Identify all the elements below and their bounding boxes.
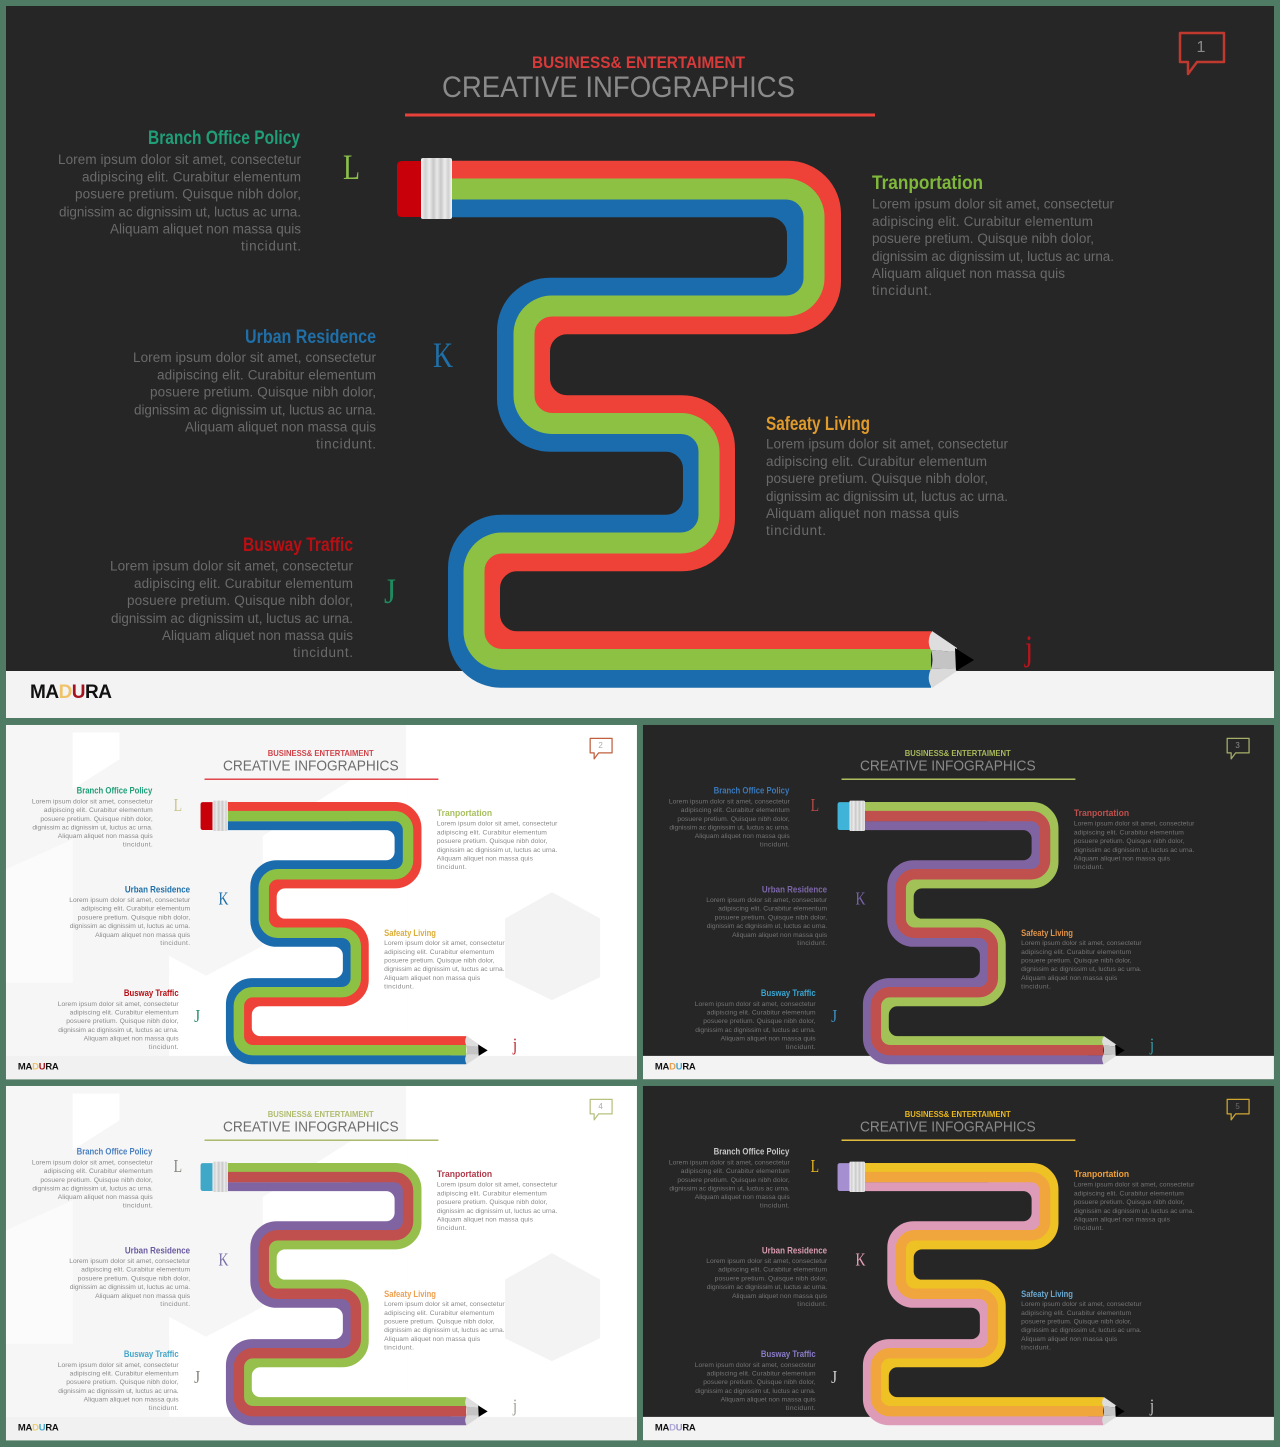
text block: Busway Traffic: Busway Traffic <box>124 988 179 999</box>
text block: Urban Residence: Aliquam aliquet non massa quis <box>732 1293 828 1300</box>
text block: Tranportation: adipiscing elit. Curabitur elementum <box>437 1190 547 1197</box>
text block: Urban Residence: Aliquam aliquet non massa quis <box>95 1293 191 1300</box>
letter L: L <box>174 795 182 815</box>
text block: Urban Residence: tincidunt. <box>160 940 190 947</box>
text block: Safeaty Living: Aliquam aliquet non massa quis <box>384 975 481 982</box>
text block: Busway Traffic: posuere pretium. Quisque nibh dolor, <box>66 1379 179 1386</box>
text block: Busway Traffic: posuere pretium. Quisque nibh dolor, <box>127 593 353 608</box>
title: CREATIVE INFOGRAPHICS <box>223 1118 399 1135</box>
text block: Branch Office Policy: dignissim ac dignissim ut, luctus ac urna. <box>32 825 153 832</box>
pencil <box>201 801 488 1064</box>
text block: Branch Office Policy: Branch Office Policy <box>714 786 790 797</box>
text block: Busway Traffic: dignissim ac dignissim ut, luctus ac urna. <box>695 1388 816 1395</box>
slide background <box>643 725 1274 1079</box>
text block: Busway Traffic: adipiscing elit. Curabitur elementum <box>70 1009 179 1016</box>
icon: speech bubble with number <box>590 738 612 759</box>
text block: Tranportation: adipiscing elit. Curabitur elementum <box>437 829 547 836</box>
text block: Urban Residence: posuere pretium. Quisque nibh dolor, <box>78 914 190 921</box>
text block: Busway Traffic: dignissim ac dignissim ut, luctus ac urna. <box>58 1027 179 1034</box>
text block: Safeaty Living: Lorem ipsum dolor sit amet, consectetur <box>1021 1301 1142 1308</box>
text block: Urban Residence: Aliquam aliquet non massa quis <box>95 932 191 939</box>
text block: Branch Office Policy: Lorem ipsum dolor sit amet, consectetur <box>58 152 302 167</box>
text block: Urban Residence: dignissim ac dignissim ut, luctus ac urna. <box>70 1284 190 1291</box>
text block: Busway Traffic: adipiscing elit. Curabitur elementum <box>134 576 353 591</box>
slide background <box>6 1086 637 1440</box>
text block: Urban Residence: Urban Residence <box>125 885 190 896</box>
text block: Tranportation: Aliquam aliquet non massa quis <box>1074 855 1171 862</box>
text block: Safeaty Living: Lorem ipsum dolor sit amet, consectetur <box>384 940 505 947</box>
text block: Urban Residence: dignissim ac dignissim ut, luctus ac urna. <box>707 923 827 930</box>
title: CREATIVE INFOGRAPHICS <box>860 757 1036 774</box>
letter j: j <box>1023 628 1033 668</box>
logo: MADURA <box>655 1061 696 1072</box>
text block: Branch Office Policy: Aliquam aliquet non massa quis <box>58 1194 153 1201</box>
text block: Safeaty Living: posuere pretium. Quisque nibh dolor, <box>384 1318 495 1325</box>
text block: Urban Residence: dignissim ac dignissim ut, luctus ac urna. <box>70 923 190 930</box>
icon: speech bubble with number <box>1227 1099 1249 1120</box>
text block: Tranportation: adipiscing elit. Curabitur elementum <box>1074 829 1184 836</box>
text block: Tranportation: adipiscing elit. Curabitur elementum <box>1074 1190 1184 1197</box>
text block: Busway Traffic: tincidunt. <box>149 1405 179 1412</box>
text block: Branch Office Policy: dignissim ac dignissim ut, luctus ac urna. <box>59 204 301 219</box>
text block: Urban Residence <box>133 327 376 452</box>
icon: speech bubble with number: 1 <box>1197 39 1206 56</box>
letter K: K <box>218 889 228 909</box>
background hexagons <box>6 725 600 1056</box>
letter J: J <box>194 1367 200 1387</box>
text block: Branch Office Policy: posuere pretium. Quisque nibh dolor, <box>75 187 301 202</box>
text block: Safeaty Living: Safeaty Living <box>1021 928 1073 939</box>
text block: Tranportation: Lorem ipsum dolor sit amet, consectetur <box>1074 821 1195 828</box>
text block: Urban Residence: posuere pretium. Quisque nibh dolor, <box>78 1275 190 1282</box>
text block: Busway Traffic: Aliquam aliquet non massa quis <box>84 1397 179 1404</box>
text block: Urban Residence: dignissim ac dignissim ut, luctus ac urna. <box>707 1284 827 1291</box>
text block: Branch Office Policy: posuere pretium. Quisque nibh dolor, <box>677 1177 790 1184</box>
text block: Tranportation: posuere pretium. Quisque nibh dolor, <box>872 231 1094 246</box>
text block: Urban Residence: Urban Residence <box>245 327 376 348</box>
text block: Urban Residence: adipiscing elit. Curabitur elementum <box>718 1267 828 1274</box>
text block: Busway Traffic <box>695 1349 816 1412</box>
text block: Tranportation <box>1074 1169 1195 1232</box>
text block: Busway Traffic: dignissim ac dignissim ut, luctus ac urna. <box>695 1027 816 1034</box>
text block: Branch Office Policy: Branch Office Policy <box>148 128 300 149</box>
title <box>842 748 1075 780</box>
text block: Tranportation: Aliquam aliquet non massa quis <box>437 1216 534 1223</box>
text block: Busway Traffic: Busway Traffic <box>761 1349 816 1360</box>
text block: Tranportation: dignissim ac dignissim ut, luctus ac urna. <box>437 1208 557 1215</box>
text block: Urban Residence: Urban Residence <box>125 1246 190 1257</box>
text block: Tranportation: tincidunt. <box>1074 864 1104 871</box>
text block: Urban Residence: adipiscing elit. Curabitur elementum <box>81 1267 191 1274</box>
text block: Busway Traffic <box>110 535 354 660</box>
text block: Safeaty Living <box>1021 1289 1142 1351</box>
title <box>842 1109 1075 1141</box>
pencil <box>838 801 1125 1064</box>
text block: Urban Residence <box>69 1246 191 1308</box>
text block: Tranportation: tincidunt. <box>872 283 932 298</box>
logo: MADURA <box>18 1422 59 1433</box>
text block: Safeaty Living: adipiscing elit. Curabitur elementum <box>1021 1310 1132 1317</box>
text block: Busway Traffic: Busway Traffic <box>761 988 816 999</box>
text block: Tranportation: dignissim ac dignissim ut, luctus ac urna. <box>872 249 1114 264</box>
text block: Safeaty Living: tincidunt. <box>766 523 826 538</box>
letter K: K <box>855 889 865 909</box>
text block: Branch Office Policy: adipiscing elit. Curabitur elementum <box>44 1168 153 1175</box>
panel: slide 5 (dark, yellow orange pink) <box>643 1086 1274 1440</box>
text block: Safeaty Living: Aliquam aliquet non massa quis <box>384 1336 481 1343</box>
text block: Branch Office Policy: Lorem ipsum dolor sit amet, consectetur <box>669 799 791 806</box>
title: CREATIVE INFOGRAPHICS <box>442 71 795 104</box>
title: CREATIVE INFOGRAPHICS <box>860 1118 1036 1135</box>
text block: Busway Traffic: posuere pretium. Quisque nibh dolor, <box>703 1379 816 1386</box>
text block: Tranportation <box>437 808 558 871</box>
text block: Branch Office Policy: posuere pretium. Quisque nibh dolor, <box>677 816 790 823</box>
text block: Safeaty Living: adipiscing elit. Curabitur elementum <box>1021 949 1132 956</box>
background hexagons <box>6 1086 600 1417</box>
icon: speech bubble with number: 2 <box>598 741 603 750</box>
text block: Safeaty Living: tincidunt. <box>1021 1344 1051 1351</box>
footer band <box>6 1417 637 1440</box>
text block: Branch Office Policy: tincidunt. <box>241 239 301 254</box>
text block: Urban Residence <box>706 885 828 947</box>
text block: Safeaty Living: Safeaty Living <box>384 928 436 939</box>
text block: Safeaty Living: Aliquam aliquet non massa quis <box>1021 1336 1118 1343</box>
text block: Branch Office Policy: Branch Office Policy <box>77 1147 153 1158</box>
text block: Branch Office Policy <box>58 128 302 254</box>
text block: Tranportation <box>872 173 1114 298</box>
letter j: j <box>1149 1034 1154 1054</box>
text block: Safeaty Living: Aliquam aliquet non massa quis <box>1021 975 1118 982</box>
text block: Urban Residence: Lorem ipsum dolor sit amet, consectetur <box>133 350 376 365</box>
text block: Urban Residence: Aliquam aliquet non massa quis <box>185 420 376 435</box>
text block: Branch Office Policy: tincidunt. <box>123 842 153 849</box>
letter J: J <box>831 1367 837 1387</box>
letter J: J <box>194 1006 200 1026</box>
text block: Tranportation: posuere pretium. Quisque nibh dolor, <box>1074 838 1184 845</box>
text block: Tranportation: Lorem ipsum dolor sit amet, consectetur <box>437 821 558 828</box>
text block: Safeaty Living: Lorem ipsum dolor sit amet, consectetur <box>1021 940 1142 947</box>
text block: Branch Office Policy: posuere pretium. Quisque nibh dolor, <box>40 1177 153 1184</box>
text block: Tranportation: Tranportation <box>872 173 983 194</box>
text block: Safeaty Living: posuere pretium. Quisque nibh dolor, <box>766 471 988 486</box>
logo: MADURA <box>655 1422 696 1433</box>
logo: MADURA <box>18 1061 59 1072</box>
letter K: K <box>433 335 453 375</box>
text block: Tranportation: Aliquam aliquet non massa quis <box>1074 1216 1171 1223</box>
letter j: j <box>512 1395 517 1415</box>
footer band <box>643 1417 1274 1440</box>
text block: Urban Residence <box>69 885 191 947</box>
icon: speech bubble with number: 3 <box>1235 741 1240 750</box>
title <box>205 1109 438 1141</box>
title <box>405 53 875 116</box>
text block: Busway Traffic: Busway Traffic <box>243 535 353 556</box>
text block: Branch Office Policy: tincidunt. <box>760 842 790 849</box>
text block: Safeaty Living <box>1021 928 1142 990</box>
text block: Tranportation: tincidunt. <box>1074 1225 1104 1232</box>
text block: Tranportation: Tranportation <box>1074 1169 1129 1180</box>
icon: speech bubble with number: 4 <box>598 1102 603 1111</box>
text block: Urban Residence: posuere pretium. Quisque nibh dolor, <box>715 914 827 921</box>
title <box>205 748 438 780</box>
icon: speech bubble with number <box>1180 33 1224 74</box>
title: BUSINESS& ENTERTAIMENT <box>268 1109 374 1119</box>
text block: Safeaty Living: posuere pretium. Quisque nibh dolor, <box>1021 1318 1132 1325</box>
text block: Tranportation: Aliquam aliquet non massa quis <box>437 855 534 862</box>
text block: Branch Office Policy: tincidunt. <box>760 1203 790 1210</box>
slide background <box>6 725 637 1079</box>
text block: Urban Residence: Urban Residence <box>762 885 827 896</box>
text block: Busway Traffic: Aliquam aliquet non massa quis <box>84 1036 179 1043</box>
text block: Branch Office Policy: adipiscing elit. Curabitur elementum <box>681 1168 790 1175</box>
text block: Busway Traffic <box>58 1349 179 1412</box>
text block: Urban Residence: adipiscing elit. Curabitur elementum <box>157 367 376 382</box>
text block: Safeaty Living: tincidunt. <box>384 1344 414 1351</box>
icon: speech bubble with number <box>590 1099 612 1120</box>
text block: Branch Office Policy: Lorem ipsum dolor sit amet, consectetur <box>669 1160 791 1167</box>
text block: Urban Residence: Urban Residence <box>762 1246 827 1257</box>
text block: Safeaty Living: adipiscing elit. Curabitur elementum <box>384 1310 495 1317</box>
pencil <box>201 1162 488 1425</box>
text block: Tranportation: dignissim ac dignissim ut, luctus ac urna. <box>1074 1208 1194 1215</box>
text block: Urban Residence: adipiscing elit. Curabitur elementum <box>81 906 191 913</box>
text block: Tranportation <box>1074 808 1195 871</box>
title: BUSINESS& ENTERTAIMENT <box>905 1109 1011 1119</box>
text block: Tranportation: Lorem ipsum dolor sit amet, consectetur <box>1074 1182 1195 1189</box>
icon: speech bubble with number: 5 <box>1235 1102 1240 1111</box>
text block: Busway Traffic: adipiscing elit. Curabitur elementum <box>707 1370 816 1377</box>
text block: Safeaty Living: tincidunt. <box>384 983 414 990</box>
text block: Branch Office Policy: adipiscing elit. Curabitur elementum <box>681 807 790 814</box>
text block: Branch Office Policy: Branch Office Policy <box>714 1147 790 1158</box>
text block: Urban Residence: Aliquam aliquet non massa quis <box>732 932 828 939</box>
text block: Tranportation: dignissim ac dignissim ut, luctus ac urna. <box>1074 847 1194 854</box>
panel: slide 4 (light, green red purple) <box>6 1086 637 1440</box>
text block: Branch Office Policy: tincidunt. <box>123 1203 153 1210</box>
text block: Safeaty Living: posuere pretium. Quisque nibh dolor, <box>384 957 495 964</box>
slide background <box>6 6 1274 718</box>
text block: Branch Office Policy: Branch Office Policy <box>77 786 153 797</box>
text block: Busway Traffic: adipiscing elit. Curabitur elementum <box>70 1370 179 1377</box>
letter j: j <box>1149 1395 1154 1415</box>
letter K: K <box>218 1250 228 1270</box>
text block: Branch Office Policy: adipiscing elit. Curabitur elementum <box>82 169 301 184</box>
text block: Tranportation: Lorem ipsum dolor sit amet, consectetur <box>437 1182 558 1189</box>
text block: Urban Residence: dignissim ac dignissim ut, luctus ac urna. <box>134 402 376 417</box>
letter L: L <box>811 1156 819 1176</box>
title: BUSINESS& ENTERTAIMENT <box>905 748 1011 758</box>
text block: Safeaty Living: dignissim ac dignissim ut, luctus ac urna. <box>384 966 505 973</box>
text block: Urban Residence: tincidunt. <box>160 1301 190 1308</box>
text block: Tranportation: adipiscing elit. Curabitur elementum <box>872 214 1093 229</box>
text block: Tranportation: Lorem ipsum dolor sit amet, consectetur <box>872 196 1114 212</box>
text block: Busway Traffic: tincidunt. <box>786 1044 816 1051</box>
text block: Tranportation: dignissim ac dignissim ut, luctus ac urna. <box>437 847 557 854</box>
text block: Safeaty Living: Lorem ipsum dolor sit amet, consectetur <box>766 436 1008 452</box>
letter L: L <box>343 147 360 187</box>
text block: Urban Residence: Lorem ipsum dolor sit amet, consectetur <box>69 897 191 904</box>
text block: Busway Traffic: posuere pretium. Quisque nibh dolor, <box>66 1018 179 1025</box>
text block: Urban Residence: Lorem ipsum dolor sit amet, consectetur <box>706 897 828 904</box>
text block: Branch Office Policy: Aliquam aliquet non massa quis <box>58 833 153 840</box>
text block: Urban Residence: tincidunt. <box>797 940 827 947</box>
letter J: J <box>831 1006 837 1026</box>
text block: Busway Traffic: Lorem ipsum dolor sit amet, consectetur <box>695 1001 816 1008</box>
text block: Urban Residence: Lorem ipsum dolor sit amet, consectetur <box>706 1258 828 1265</box>
letter K: K <box>855 1250 865 1270</box>
text block: Urban Residence: tincidunt. <box>797 1301 827 1308</box>
text block: Branch Office Policy: Lorem ipsum dolor sit amet, consectetur <box>32 1160 154 1167</box>
text block: Busway Traffic: Lorem ipsum dolor sit amet, consectetur <box>58 1001 179 1008</box>
icon: speech bubble with number <box>1227 738 1249 759</box>
text block: Branch Office Policy: Aliquam aliquet non massa quis <box>695 1194 790 1201</box>
text block: Branch Office Policy: Lorem ipsum dolor sit amet, consectetur <box>32 799 154 806</box>
text block: Branch Office Policy: Aliquam aliquet non massa quis <box>110 222 301 237</box>
text block: Tranportation: tincidunt. <box>437 1225 467 1232</box>
text block: Branch Office Policy: adipiscing elit. Curabitur elementum <box>44 807 153 814</box>
text block: Urban Residence: Lorem ipsum dolor sit amet, consectetur <box>69 1258 191 1265</box>
text block: Branch Office Policy: dignissim ac dignissim ut, luctus ac urna. <box>669 825 790 832</box>
slide background <box>643 1086 1274 1440</box>
text block: Busway Traffic <box>695 988 816 1051</box>
footer band <box>6 671 1274 718</box>
panel: slide 3 (dark, green red purple) <box>643 725 1274 1079</box>
text block: Safeaty Living: Aliquam aliquet non massa quis <box>766 506 959 521</box>
text block: Safeaty Living: Safeaty Living <box>1021 1289 1073 1300</box>
letter J: J <box>384 571 396 611</box>
pencil <box>838 1162 1125 1425</box>
text block: Busway Traffic: Aliquam aliquet non massa quis <box>162 628 353 643</box>
footer band <box>6 1056 637 1079</box>
text block: Safeaty Living: dignissim ac dignissim ut, luctus ac urna. <box>1021 1327 1142 1334</box>
letter L: L <box>811 795 819 815</box>
text block: Safeaty Living <box>766 414 1008 538</box>
text block: Safeaty Living: adipiscing elit. Curabitur elementum <box>384 949 495 956</box>
text block: Busway Traffic: posuere pretium. Quisque nibh dolor, <box>703 1018 816 1025</box>
text block: Busway Traffic: Lorem ipsum dolor sit amet, consectetur <box>695 1362 816 1369</box>
text block: Safeaty Living: dignissim ac dignissim ut, luctus ac urna. <box>384 1327 505 1334</box>
text block: Busway Traffic: tincidunt. <box>293 645 353 660</box>
text block: Branch Office Policy: Aliquam aliquet non massa quis <box>695 833 790 840</box>
text block: Busway Traffic: Aliquam aliquet non massa quis <box>721 1397 816 1404</box>
text block: Safeaty Living: Safeaty Living <box>766 414 870 435</box>
text block: Safeaty Living: dignissim ac dignissim ut, luctus ac urna. <box>1021 966 1142 973</box>
text block: Safeaty Living: dignissim ac dignissim ut, luctus ac urna. <box>766 489 1008 504</box>
text block: Tranportation: Aliquam aliquet non massa quis <box>872 266 1065 281</box>
text block: Busway Traffic: tincidunt. <box>786 1405 816 1412</box>
text block: Tranportation: posuere pretium. Quisque nibh dolor, <box>437 838 547 845</box>
text block: Busway Traffic: adipiscing elit. Curabitur elementum <box>707 1009 816 1016</box>
letter j: j <box>512 1034 517 1054</box>
text block: Tranportation: tincidunt. <box>437 864 467 871</box>
text block: Tranportation: posuere pretium. Quisque nibh dolor, <box>1074 1199 1184 1206</box>
text block: Safeaty Living <box>384 1289 505 1351</box>
text block: Branch Office Policy: dignissim ac dignissim ut, luctus ac urna. <box>32 1186 153 1193</box>
panel: slide 2 (light, red green blue) <box>6 725 637 1079</box>
text block: Branch Office Policy <box>669 786 791 849</box>
text block: Busway Traffic: Aliquam aliquet non massa quis <box>721 1036 816 1043</box>
text block: Branch Office Policy: dignissim ac dignissim ut, luctus ac urna. <box>669 1186 790 1193</box>
text block: Busway Traffic <box>58 988 179 1051</box>
text block: Tranportation: Tranportation <box>437 1169 492 1180</box>
text block: Urban Residence <box>706 1246 828 1308</box>
text block: Safeaty Living: Safeaty Living <box>384 1289 436 1300</box>
text block: Urban Residence: tincidunt. <box>316 437 376 452</box>
text block: Safeaty Living: adipiscing elit. Curabitur elementum <box>766 454 987 469</box>
title: BUSINESS& ENTERTAIMENT <box>268 748 374 758</box>
footer band <box>643 1056 1274 1079</box>
text block: Branch Office Policy <box>32 786 154 849</box>
text block: Urban Residence: posuere pretium. Quisque nibh dolor, <box>715 1275 827 1282</box>
text block: Safeaty Living: tincidunt. <box>1021 983 1051 990</box>
text block: Tranportation: Tranportation <box>1074 808 1129 819</box>
text block: Branch Office Policy <box>32 1147 154 1210</box>
text block: Safeaty Living <box>384 928 505 990</box>
text block: Tranportation <box>437 1169 558 1232</box>
text block: Busway Traffic: Lorem ipsum dolor sit amet, consectetur <box>58 1362 179 1369</box>
letter L: L <box>174 1156 182 1176</box>
text block: Busway Traffic: Lorem ipsum dolor sit amet, consectetur <box>110 558 354 574</box>
text block: Busway Traffic: dignissim ac dignissim ut, luctus ac urna. <box>58 1388 179 1395</box>
title: CREATIVE INFOGRAPHICS <box>223 757 399 774</box>
panel: slide 1 (large dark) <box>6 6 1274 718</box>
text block: Busway Traffic: Busway Traffic <box>124 1349 179 1360</box>
text block: Branch Office Policy: posuere pretium. Quisque nibh dolor, <box>40 816 153 823</box>
text block: Urban Residence: posuere pretium. Quisque nibh dolor, <box>150 385 376 400</box>
text block: Safeaty Living: Lorem ipsum dolor sit amet, consectetur <box>384 1301 505 1308</box>
text block: Safeaty Living: posuere pretium. Quisque nibh dolor, <box>1021 957 1132 964</box>
text block: Tranportation: posuere pretium. Quisque nibh dolor, <box>437 1199 547 1206</box>
text block: Tranportation: Tranportation <box>437 808 492 819</box>
title: BUSINESS& ENTERTAIMENT <box>532 53 746 72</box>
text block: Urban Residence: adipiscing elit. Curabitur elementum <box>718 906 828 913</box>
pencil <box>397 158 974 688</box>
logo: MADURA <box>30 682 112 703</box>
text block: Branch Office Policy <box>669 1147 791 1210</box>
text block: Busway Traffic: dignissim ac dignissim ut, luctus ac urna. <box>111 611 353 626</box>
text block: Busway Traffic: tincidunt. <box>149 1044 179 1051</box>
